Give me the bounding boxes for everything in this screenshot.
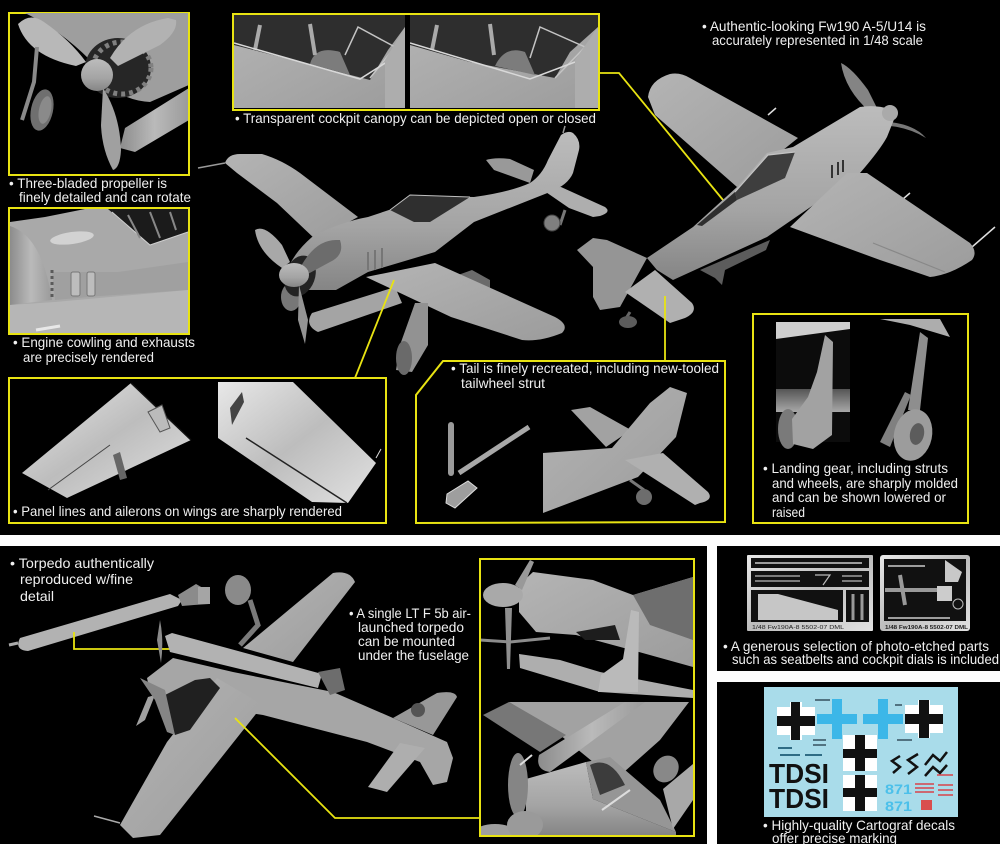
photo-etched sheet two [880, 555, 970, 631]
caption: decals: • Highly-quality Cartograf decals [763, 817, 955, 833]
decal: code letters: TDSI [769, 758, 829, 789]
right wing [790, 173, 975, 277]
caption: torpedo: • Torpedo authentically [10, 555, 154, 571]
upper wing [243, 572, 355, 662]
caption: propeller: • Three-bladed propeller is [9, 175, 167, 191]
panel: tail inset [416, 361, 725, 523]
decal: chevrons [892, 752, 947, 776]
leader line: torpedo [74, 632, 172, 649]
caption: engine cowling [13, 334, 195, 365]
caption: tail: • Tail is finely recreated, including new-tooled [451, 360, 719, 376]
photo-etched sheet one: 1/48 Fw190A-8 5502-07 DML [752, 625, 844, 631]
caption: tail: tailwheel strut [461, 375, 545, 391]
caption: propeller [9, 175, 191, 205]
decal: blue crosses [817, 699, 903, 739]
panel: torpedo detail insets [475, 559, 694, 840]
caption: canopy: • Transparent cockpit canopy can be depicted open or closed [235, 110, 596, 126]
caption: photo-etched parts: • A generous selection of photo-etched parts [723, 638, 989, 654]
caption: overall accuracy: • Authentic-looking Fw190 A-5/U14 is [702, 18, 926, 34]
caption: landing gear: raised [772, 504, 805, 520]
panel: canopy open and closed inset [233, 14, 599, 110]
illustration: main model top-left view [198, 126, 608, 375]
photo-etched sheet two: 1/48 Fw190A-8 5502-07 DML [885, 625, 968, 631]
caption: single torpedo: under the fuselage [358, 647, 469, 663]
propeller blade left [255, 229, 290, 268]
caption: single torpedo: launched torpedo [358, 619, 464, 635]
caption: landing gear: and wheels, are sharply molded [772, 475, 958, 491]
panel: propeller inset [9, 13, 189, 175]
illustration: main model right view [577, 63, 995, 328]
wing [120, 678, 263, 838]
caption: photo-etched parts [723, 638, 999, 667]
fuselage [285, 132, 579, 290]
left wing [225, 154, 358, 240]
leader line: underside to inset [235, 718, 480, 818]
fuselage [147, 658, 453, 785]
caption: landing gear: and can be shown lowered or [772, 489, 946, 505]
left wing [648, 74, 798, 187]
caption: propeller: finely detailed and can rotate [19, 189, 191, 205]
right wing [366, 263, 565, 340]
caption: tail [451, 360, 719, 391]
decal: white cross frames and black crosses [777, 700, 943, 811]
torpedo [165, 633, 322, 688]
caption: torpedo [10, 555, 154, 604]
panel: decal sheet [717, 682, 1000, 844]
propeller hub and blades [300, 240, 341, 275]
caption: single torpedo [349, 605, 471, 663]
caption: wing panel lines: • Panel lines and ailerons on wings are sharply rendered [13, 503, 342, 519]
panel: engine cowling inset [9, 208, 189, 334]
tailplanes [393, 692, 457, 735]
caption: single torpedo: • A single LT F 5b air- [349, 605, 471, 621]
decal: code letters [769, 758, 829, 814]
tail [577, 238, 647, 310]
panel: bottom black panel [0, 546, 707, 844]
torpedo underslung [309, 287, 402, 332]
caption: torpedo: detail [20, 588, 54, 604]
illustration: underside model [94, 572, 457, 838]
decal: numbers: 871 [885, 798, 912, 814]
fuselage [647, 106, 897, 280]
decal: numbers [885, 781, 912, 814]
propeller [157, 620, 162, 663]
leader line: wing to wing inset [355, 280, 394, 378]
caption: engine cowling: • Engine cowling and exhausts [13, 334, 195, 350]
panel: wing panel lines inset [9, 378, 386, 523]
caption: landing gear: • Landing gear, including struts [763, 460, 948, 476]
decal: numbers: 871 [885, 781, 912, 797]
panel: landing gear inset [753, 314, 968, 523]
caption: landing gear [763, 460, 958, 520]
white separators between panels [0, 535, 1000, 844]
landing gear [225, 575, 251, 605]
panel: photo-etched parts [717, 546, 1000, 671]
caption: decals [763, 817, 955, 844]
caption: torpedo: reproduced w/fine [20, 571, 133, 587]
leader line: canopy to aircraft [599, 73, 723, 200]
decal: red stencils [915, 775, 953, 795]
main landing gear [396, 303, 428, 372]
illustration: separate torpedo [9, 584, 210, 651]
photo-etched sheet one [747, 555, 873, 631]
caption: overall accuracy [702, 18, 926, 48]
decal: code letters: TDSI [769, 783, 829, 814]
leader line: tail to tail inset [664, 296, 666, 361]
caption: single torpedo: can be mounted [358, 633, 455, 649]
caption: overall accuracy: accurately represented in 1/48 scale [712, 32, 923, 48]
propeller blades [841, 63, 878, 112]
caption: engine cowling: are precisely rendered [23, 349, 154, 365]
